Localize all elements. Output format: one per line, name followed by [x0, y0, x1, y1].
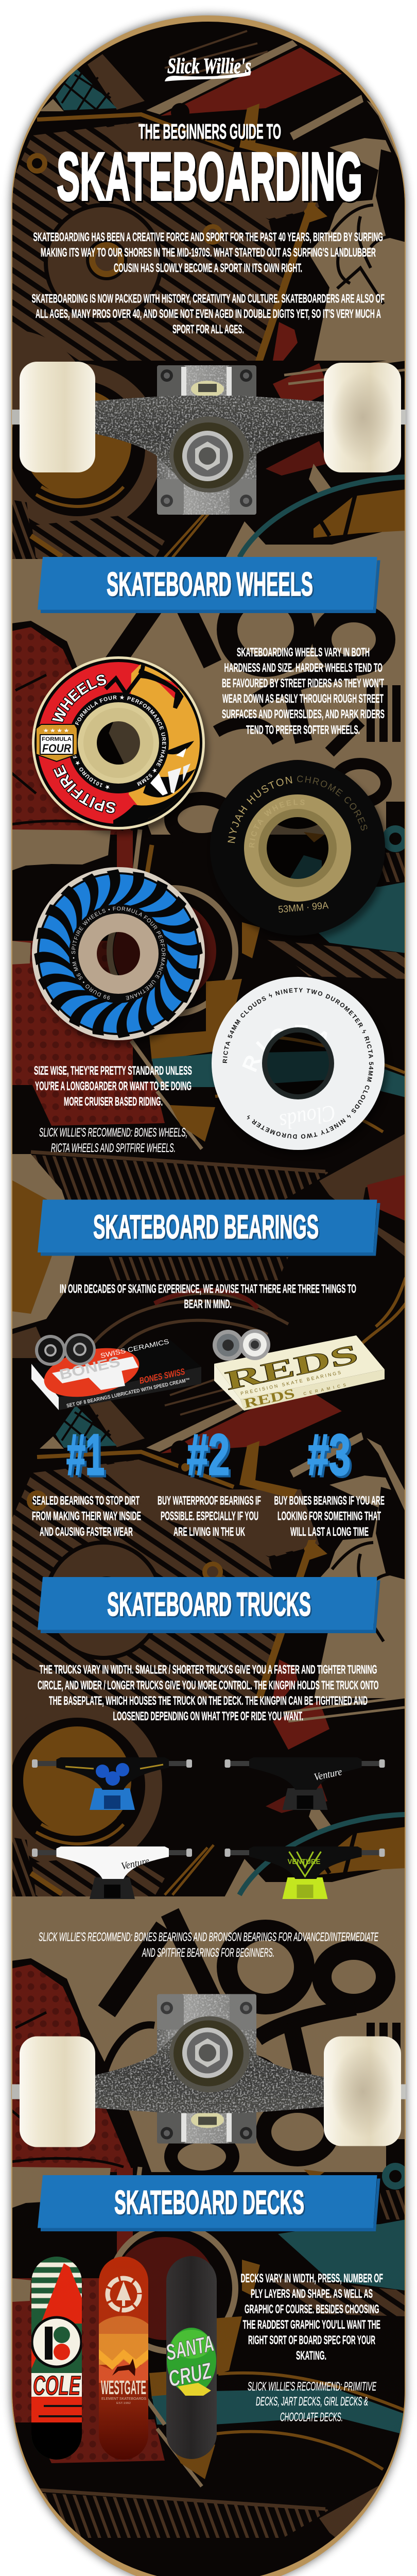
deck: Santa Cruz: SANTA	[164, 2331, 216, 2366]
banner: skateboard bearings	[38, 1199, 380, 1256]
deck: Element Westgate: ELEMENT SKATEBOARDS	[101, 2397, 146, 2401]
wheel: Spitfire Formula Four red: SPITFIRE	[53, 764, 116, 814]
banner: skateboard wheels	[38, 557, 380, 613]
deck: Element Westgate: EST.1992	[116, 2402, 131, 2405]
wheel: Spitfire Formula Four red: WHEELS	[51, 674, 107, 723]
text: bearings intro	[60, 1282, 356, 1311]
text: wheel sizes and recommendation: SIZE WISE, THEY'RE PRETTY STANDARD UNLESS	[34, 1064, 192, 1078]
wheel: Ricta Nyjah Huston black: NYJAH HUSTON	[228, 776, 292, 843]
deck: Plan B Cole	[31, 2257, 82, 2460]
deck: Plan B Cole: COLE	[33, 2371, 81, 2401]
text: trucks recommendation: AND SPITFIRE BEARINGS FOR BEGINNERS.	[142, 1946, 274, 1960]
badge: Formula Four: FORMULA	[42, 736, 72, 742]
banner: skateboard trucks	[38, 1577, 380, 1633]
text: wheel sizes and recommendation	[34, 1064, 192, 1155]
wheel: Spitfire blue swirl: 99 DURO • 56 MM • SPITFIRE WHEELS • FORMULA FOUR PERFORMANCE URETHANE	[71, 907, 166, 1000]
numbered tip 1: FROM MAKING THEIR WAY INSIDE	[32, 1510, 141, 1523]
numbered tip 2	[158, 1422, 261, 1539]
numbered tip 2: BUY WATERPROOF BEARINGS IF	[158, 1494, 261, 1507]
product: Bones Reds bearings box	[213, 1329, 385, 1411]
numbered tip 1: SEALED BEARINGS TO STOP DIRT	[32, 1494, 140, 1507]
numbered tip 2: POSSIBLE. ESPECIALLY IF YOU	[161, 1510, 258, 1523]
product: Bones Swiss bearings box	[31, 1333, 201, 1410]
intro text	[32, 230, 385, 336]
title	[57, 120, 362, 214]
product: Bones Swiss bearings box: SWISS CERAMICS	[100, 1337, 170, 1360]
numbered tip 2: #2	[187, 1422, 230, 1487]
product: black Venture truck	[224, 1757, 385, 1810]
numbered tip 3	[274, 1422, 385, 1539]
text: wheel sizes and recommendation: RICTA WHEELS AND SPITFIRE WHEELS.	[51, 1141, 176, 1155]
deck: Santa Cruz	[164, 2256, 217, 2459]
wheel: Spitfire blue swirl	[32, 867, 210, 1048]
deck: Santa Cruz: CRUZ	[166, 2358, 215, 2392]
product: Bones Swiss bearings box: BONES	[58, 1353, 121, 1383]
badge: Formula Four: ★ ★ ★ ★	[43, 728, 70, 733]
text: wheel sizes and recommendation: MORE CRUISER BASED RIDING.	[64, 1095, 163, 1109]
numbered tip 1: AND CAUSING FASTER WEAR	[40, 1525, 133, 1539]
product: Bones Reds bearings box: CERAMICS	[303, 1382, 350, 1396]
logo: Slick Willie's	[165, 55, 251, 81]
intro text: SPORT FOR ALL AGES.	[172, 323, 244, 336]
text: decks description and recommendation	[241, 2272, 383, 2425]
product: Bones Reds bearings box: REDS	[242, 1386, 296, 1411]
product: white Venture truck	[32, 1846, 192, 1899]
product: black truck with blue roses	[32, 1757, 192, 1810]
wheel: Ricta Nyjah Huston black: CHROME CORES	[297, 775, 368, 831]
product: Bones Swiss bearings box: BONES SWISS	[138, 1367, 186, 1386]
wheel: Ricta Nyjah Huston black: RICTA WHEELS	[249, 800, 305, 848]
badge: Formula Four	[36, 724, 77, 761]
wheel: Spitfire Formula Four red	[32, 656, 211, 838]
wheel: Ricta Clouds white: RICTA 54MM CLOUDS ϟ NINETY TWO DUROMETER ϟ RICTA 54MM CLOUDS ϟ NINETY TWO DUROMETER ϟ	[222, 988, 374, 1139]
wheel: Ricta Clouds white: Clouds	[277, 1100, 338, 1135]
text: bearings intro: BEAR IN MIND.	[184, 1297, 232, 1311]
product: lime Venture truck: VENTURE	[287, 1857, 320, 1866]
icon: skateboard truck top	[12, 362, 406, 515]
numbered tip 3: #3	[307, 1422, 351, 1487]
text: decks description and recommendation: SKATING.	[296, 2349, 326, 2363]
numbered tip 2: ARE LIVING IN THE UK	[173, 1525, 245, 1539]
product: lime Venture truck	[224, 1846, 385, 1899]
text: wheel sizes and recommendation: YOU'RE A LONGBOARDER OR WANT TO BE DOING	[35, 1079, 192, 1093]
numbered tip 1	[32, 1422, 141, 1539]
badge: Formula Four: FOUR	[42, 742, 71, 755]
banner: skateboard decks	[38, 2175, 380, 2231]
text: wheels hardness	[222, 646, 385, 737]
product: white Venture truck: Venture	[120, 1855, 150, 1872]
wheel: Ricta Nyjah Huston black	[212, 761, 390, 939]
deck: Element Westgate	[99, 2257, 148, 2460]
title: THE BEGINNERS GUIDE TO	[138, 120, 281, 143]
text: wheel sizes and recommendation: SLICK WILLIE'S RECOMMEND: BONES WHEELS,	[39, 1126, 187, 1140]
text: WESTGATE	[101, 2377, 146, 2399]
text: trucks description	[38, 1663, 379, 1723]
numbered tip 1: #1	[66, 1422, 105, 1487]
text: decks description and recommendation: CHOCOLATE DECKS.	[280, 2410, 343, 2425]
wheel: Ricta Clouds white: RICTA	[242, 1025, 327, 1072]
icon: skateboard truck bottom	[12, 1994, 406, 2147]
product: Bones Reds bearings box: REDS	[223, 1340, 361, 1396]
product: Bones Reds bearings box: PRECISION SKATE BEARINGS	[240, 1369, 343, 1396]
wheel: Ricta Nyjah Huston black: 53MM · 99A	[277, 900, 329, 916]
logo: Slick Willie's: Slick Willie's	[167, 55, 251, 78]
product: Bones Swiss bearings box: SET OF 8 BEARINGS LUBRICATED WITH SPEED CREAM™	[66, 1377, 190, 1409]
product: black Venture truck: Venture	[313, 1766, 343, 1783]
wheel: Spitfire Formula Four red: ★ 101DURO ★ RADIAL ★ FORMULA FOUR ★ PERFORMANCE URETHANE ★ 52MM	[73, 695, 166, 789]
text: trucks recommendation	[39, 1930, 378, 1960]
